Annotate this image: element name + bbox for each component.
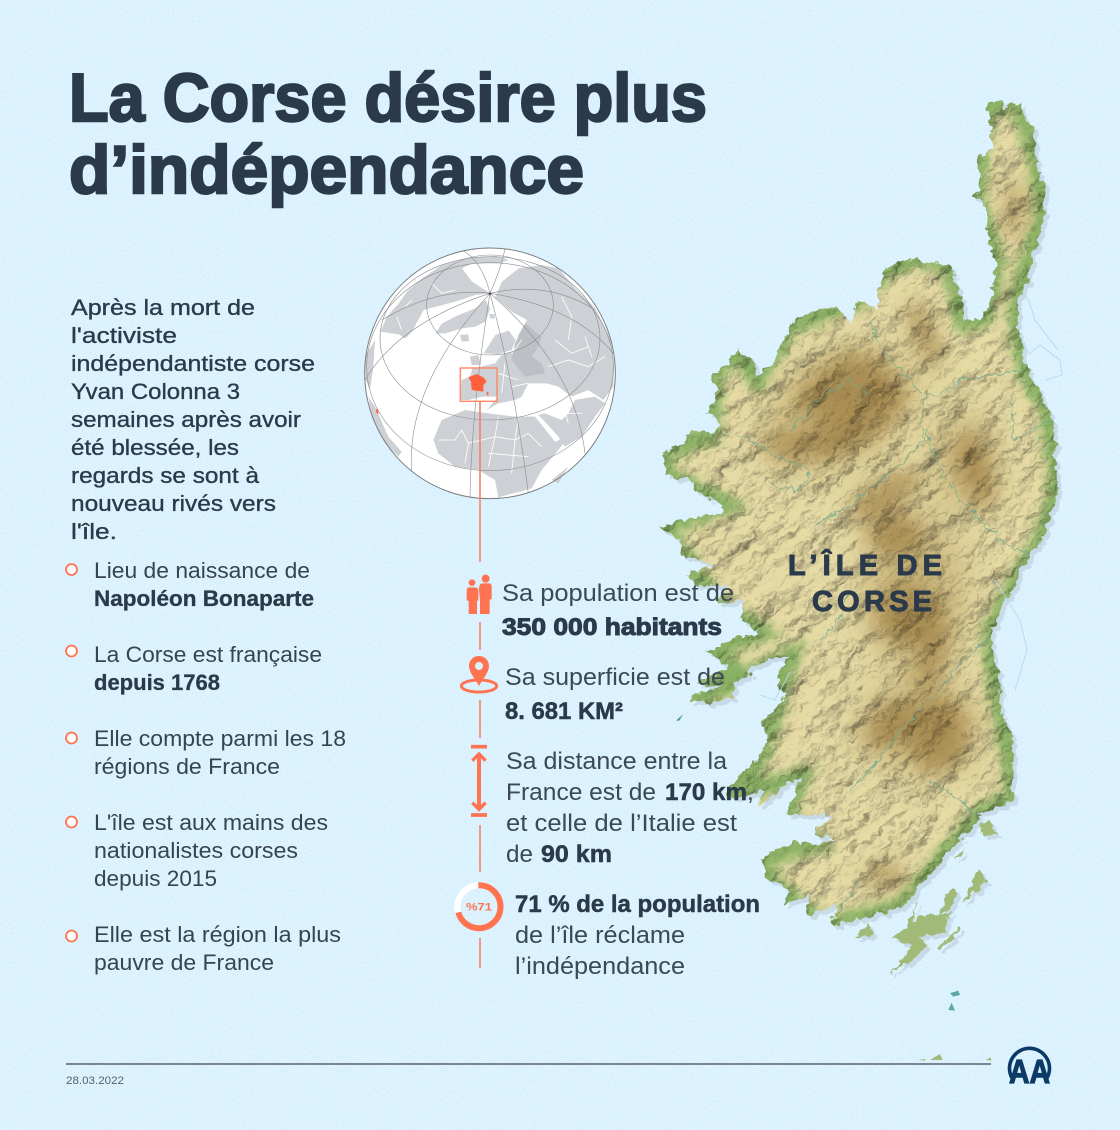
bullet: poorest region: pauvre de France [94,950,274,975]
stat: independence: 71 % de la population [515,891,760,918]
map label: CORSE [812,586,932,618]
date: 28.03.2022 [66,1075,124,1087]
stat: area [505,664,725,725]
icon: distance arrow [471,747,487,815]
intro paragraph [71,295,315,544]
stat: distance: , [747,779,754,806]
title: d’indépendance [69,132,584,208]
stat: distance: 90 km [541,841,612,868]
title [69,60,707,208]
bullet: nationalists [66,810,328,891]
bullet list [66,558,346,975]
stat: distance: Sa distance entre la [506,748,727,775]
intro paragraph: semaines après avoir [71,407,301,432]
stat: population: 350 000 habitants [502,614,722,641]
stat: area: 8. 681 KM² [505,698,623,725]
timeline connector [479,401,481,968]
stat: distance: France est de [506,779,656,806]
bullet: birthplace: Lieu de naissance de [94,558,310,583]
stat: independence [515,891,760,980]
stat: population [502,580,734,641]
footer rule [66,1063,991,1065]
islands south [855,822,998,975]
bullet: French since 1768 [66,642,322,695]
map label [788,548,942,618]
intro paragraph: Après la mort de [71,295,255,320]
bullet: 18 regions [66,726,346,779]
intro paragraph: été blessée, les [71,435,239,460]
intro paragraph: Yvan Colonna 3 [71,379,240,404]
map: relief of Corsica [640,90,1070,1061]
stat: area: Sa superficie est de [505,664,725,691]
intro paragraph: nouveau rivés vers [71,491,276,516]
stat: distance: 170 km [665,779,747,806]
stat: distance: et celle de l’Italie est [506,810,737,837]
intro paragraph: regards se sont à [71,463,260,488]
stat: population: Sa population est de [502,580,734,607]
bullet: birthplace: Napoléon Bonaparte [94,586,314,611]
intro paragraph: l'île. [71,519,117,544]
title: La Corse désire plus [69,60,707,136]
icon: 71 percent donut: %71 [466,902,492,914]
icon: location pin [461,656,497,692]
logo: AA: AA [1009,1053,1050,1090]
bullet: French since 1768: depuis 1768 [94,670,220,695]
bullet: nationalists: nationalistes corses [94,838,298,863]
map label: L’ÎLE DE [788,548,942,582]
intro paragraph: indépendantiste corse [71,351,315,376]
icon: people [467,575,492,614]
bullet: poorest region: Elle est la région la plus [94,922,341,947]
bullet: 18 regions: régions de France [94,754,280,779]
stat: independence: de l’île réclame [515,922,685,949]
stat: distance [506,748,754,868]
globe locator map [365,248,615,499]
icon: 71 percent donut [458,885,500,928]
stat: distance: de [506,841,533,868]
bullet: birthplace [66,558,314,611]
bullet: nationalists: L'île est aux mains des [94,810,328,835]
bullet: 18 regions: Elle compte parmi les 18 [94,726,346,751]
bullet: nationalists: depuis 2015 [94,866,217,891]
bullet: French since 1768: La Corse est française [94,642,322,667]
intro paragraph: l'activiste [71,323,177,348]
France highlight box [376,368,497,414]
stat: independence: l’indépendance [515,953,685,980]
bullet: poorest region [66,922,341,975]
